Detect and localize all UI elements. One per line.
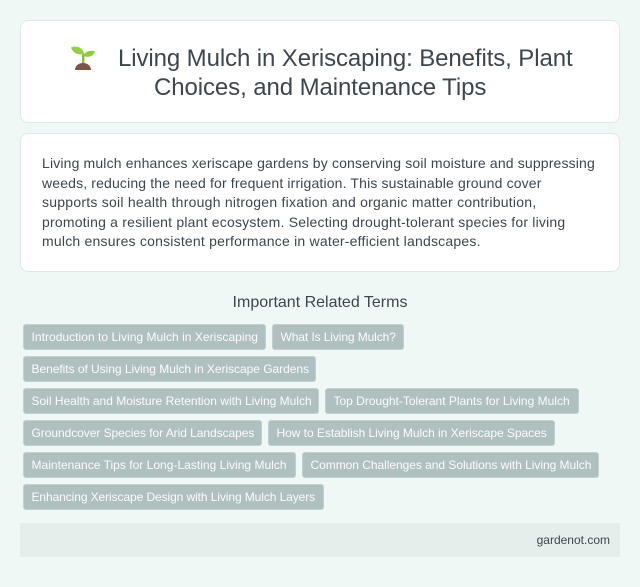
intro paragraph: promoting a resilient plant ecosystem. Selecting drought-tolerant species for living bbox=[42, 214, 565, 230]
tag bbox=[23, 420, 262, 446]
tag bbox=[268, 420, 555, 446]
intro paragraph: weeds, reducing the need for frequent irrigation. This sustainable ground cover bbox=[42, 175, 542, 191]
title: Choices, and Maintenance Tips bbox=[154, 74, 486, 101]
tag: Introduction to Living Mulch in Xeriscaping bbox=[32, 330, 258, 344]
tag bbox=[23, 356, 316, 382]
tag bbox=[272, 324, 404, 350]
tag bbox=[23, 324, 266, 350]
tag: What Is Living Mulch? bbox=[280, 330, 396, 344]
icon: seedling bbox=[71, 46, 95, 70]
tag: How to Establish Living Mulch in Xeriscape Spaces bbox=[276, 426, 547, 440]
header panel bbox=[20, 20, 620, 123]
intro paragraph: mulch ensures consistent performance in water-efficient landscapes. bbox=[42, 233, 481, 249]
related terms tag list bbox=[23, 324, 599, 510]
tag bbox=[23, 484, 324, 510]
intro paragraph bbox=[42, 155, 595, 249]
title: Living Mulch in Xeriscaping: Benefits, Plant bbox=[118, 45, 573, 72]
tag: Enhancing Xeriscape Design with Living Mulch Layers bbox=[32, 490, 315, 504]
tag: Top Drought-Tolerant Plants for Living Mulch bbox=[334, 394, 570, 408]
tag: Common Challenges and Solutions with Living Mulch bbox=[310, 458, 591, 472]
footer site name: gardenot.com bbox=[537, 533, 610, 547]
tag: Benefits of Using Living Mulch in Xeriscape Gardens bbox=[32, 362, 309, 376]
intro paragraph: supports soil health through nitrogen fixation and organic matter contribution, bbox=[42, 194, 536, 210]
intro paragraph: Living mulch enhances xeriscape gardens by conserving soil moisture and suppressing bbox=[42, 155, 595, 171]
tag: Soil Health and Moisture Retention with Living Mulch bbox=[32, 394, 312, 408]
tag bbox=[302, 452, 599, 478]
footer bar bbox=[20, 523, 620, 557]
intro text panel bbox=[20, 133, 620, 272]
tag bbox=[23, 388, 319, 414]
tag bbox=[23, 452, 296, 478]
tag: Groundcover Species for Arid Landscapes bbox=[32, 426, 254, 440]
tag: Maintenance Tips for Long-Lasting Living Mulch bbox=[32, 458, 287, 472]
related terms heading: Important Related Terms bbox=[233, 294, 407, 311]
tag bbox=[325, 388, 579, 414]
title bbox=[118, 45, 573, 101]
